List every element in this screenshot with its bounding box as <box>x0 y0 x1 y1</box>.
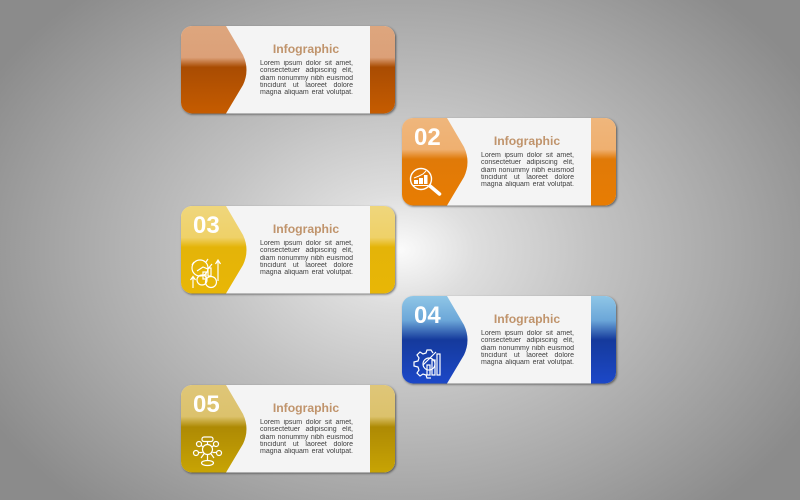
text block: diam nonummy nibh euismod <box>260 75 353 82</box>
text block: diam nonummy nibh euismod <box>481 167 574 174</box>
card 2 shape <box>402 118 618 208</box>
heading: Infographic <box>494 312 560 326</box>
panel: card 5 <box>180 384 398 475</box>
text block <box>481 330 574 366</box>
icon: growth gears <box>190 258 221 288</box>
panel: card 4 <box>402 296 618 386</box>
icon: gear with chart <box>413 349 441 379</box>
text block: Lorem ipsum dolor sit amet, <box>260 60 353 67</box>
panel: card 3 <box>180 206 398 296</box>
heading: Infographic <box>273 42 339 56</box>
panel: card 2 <box>402 118 618 208</box>
text block: diam nonummy nibh euismod <box>260 255 353 262</box>
text block: tincidunt ut laoreet dolore <box>260 441 353 448</box>
text block: diam nonummy nibh euismod <box>481 345 574 352</box>
card 1 shape <box>180 26 398 116</box>
text block: tincidunt ut laoreet dolore <box>260 262 353 269</box>
icon: network diagram <box>192 436 222 466</box>
text block <box>481 152 574 188</box>
card 3 shape <box>180 206 398 296</box>
text block <box>260 60 353 96</box>
text block: tincidunt ut laoreet dolore <box>481 174 574 181</box>
text block: Lorem ipsum dolor sit amet, <box>260 240 353 247</box>
text block <box>260 419 353 455</box>
number: 04 <box>414 302 441 328</box>
number: 05 <box>193 390 220 418</box>
text block: Lorem ipsum dolor sit amet, <box>481 152 574 159</box>
text block: Lorem ipsum dolor sit amet, <box>260 419 353 426</box>
card 5 shape <box>180 384 398 475</box>
text block: tincidunt ut laoreet dolore <box>481 352 574 359</box>
number: 03 <box>193 212 220 238</box>
heading: Infographic <box>273 400 339 414</box>
icon: magnifier with chart <box>410 168 442 196</box>
panel: card 1 <box>180 26 398 116</box>
heading: Infographic <box>494 134 560 148</box>
text block: diam nonummy nibh euismod <box>260 434 353 441</box>
number: 02 <box>414 124 441 150</box>
heading: Infographic <box>273 222 339 236</box>
card 4 shape <box>402 296 618 386</box>
text block: tincidunt ut laoreet dolore <box>260 82 353 89</box>
text block: Lorem ipsum dolor sit amet, <box>481 330 574 337</box>
text block <box>260 240 353 276</box>
